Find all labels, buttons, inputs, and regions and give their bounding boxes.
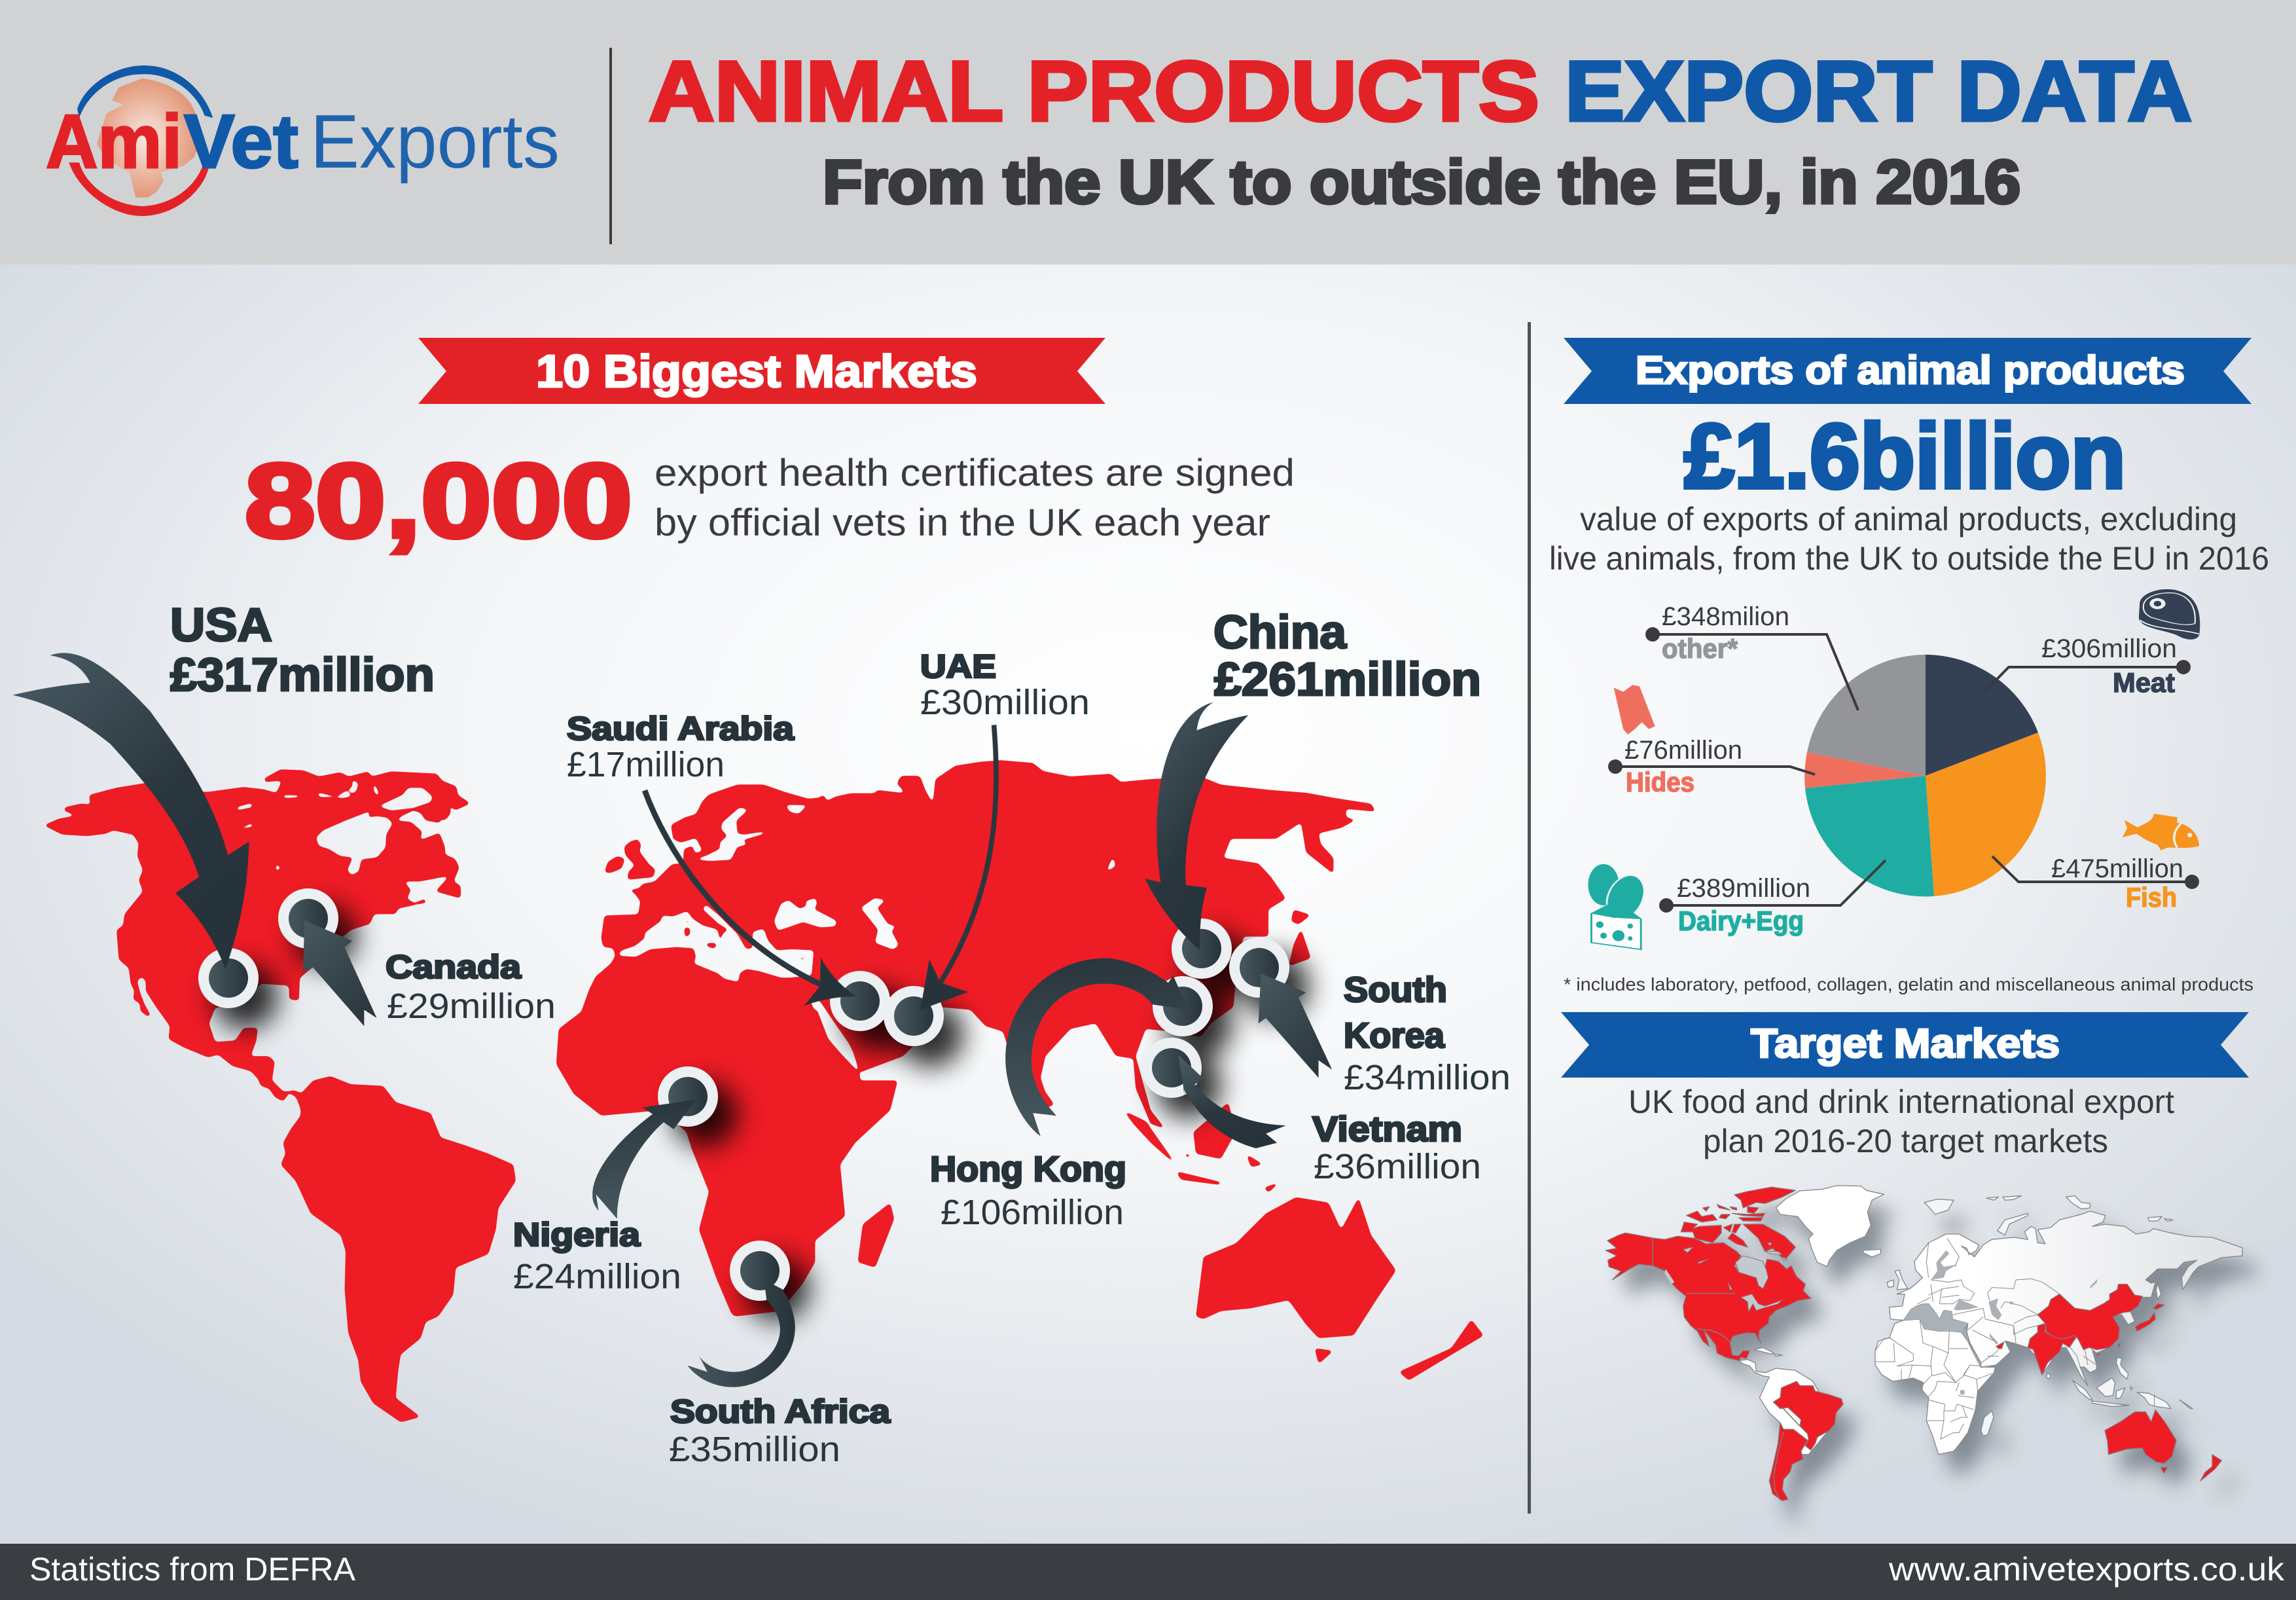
icon: fish [2123, 814, 2199, 850]
stat: 80,000 certificates: 80,000 [245, 442, 632, 559]
logo: AmiVet Exports: Vet [184, 99, 298, 184]
map: sub-Saharan Africa [556, 1010, 898, 1317]
subtitle: From the UK to outside the EU, in 2016 [823, 147, 2020, 216]
world map: target markets [1605, 1186, 2257, 1520]
marker shadows [213, 905, 1309, 1321]
marker: USA [198, 948, 259, 1008]
label: Nigeria: Nigeria [513, 1216, 641, 1253]
text: export plan: UK food and drink international export [1628, 1083, 2174, 1120]
text: value of exports: live animals, from the UK to outside the EU in 2016 [1549, 540, 2269, 577]
callout: dairy and egg: Dairy+Egg [1678, 905, 1804, 936]
divider [1528, 322, 1531, 1514]
label: USA: £317million [170, 649, 435, 701]
text: value of exports: value of exports of animal products, excluding [1580, 501, 2237, 537]
arrow: China [1145, 702, 1248, 950]
logo: AmiVet Exports: Exports [310, 99, 560, 184]
label: Saudi Arabia: £17million [567, 745, 725, 784]
label: USA: USA [170, 600, 272, 651]
label: Nigeria: £24million [513, 1257, 681, 1296]
label: China: China [1213, 607, 1347, 659]
arrow: Saudi Arabia [645, 790, 856, 1006]
marker: Canada [278, 888, 338, 949]
label: South Korea: £34million [1344, 1058, 1511, 1097]
footer: www.amivetexports.co.uk [1888, 1551, 2285, 1588]
banner: Exports of animal products: Exports of animal products [1636, 348, 2185, 392]
banner: Target Markets [1561, 1012, 2249, 1078]
label: Vietnam: £36million [1314, 1147, 1481, 1186]
label: Canada: £29million [387, 987, 556, 1026]
stat: 80,000 certificates: by official vets in the UK each year [655, 501, 1270, 544]
label: UAE [920, 648, 1090, 722]
footnote: * includes laboratory, petfood, collagen, gelatin and miscellaneous animal products [1564, 974, 2253, 994]
map: cast shadow [1620, 1205, 2257, 1520]
icon: steak [2139, 589, 2200, 640]
label: Hong Kong: Hong Kong [930, 1150, 1126, 1189]
marker: Nigeria [658, 1066, 718, 1127]
callout: fish: Fish [2126, 882, 2177, 913]
callout: fish [1992, 854, 2199, 913]
callout: meat [1983, 634, 2191, 698]
callout: other: £348milion [1662, 602, 1789, 631]
callout: hides [1608, 736, 1815, 797]
map: seas [1903, 1250, 2098, 1394]
label: South Korea: Korea [1344, 1016, 1445, 1055]
map: Asia [914, 760, 1376, 1129]
label: Vietnam [1312, 1110, 1481, 1186]
callout: other: other* [1662, 633, 1738, 664]
arrow: Vietnam [1178, 1055, 1286, 1148]
callout: other [1645, 602, 1858, 710]
arrow: South Korea [1259, 973, 1332, 1078]
title: ANIMAL PRODUCTS [649, 43, 1539, 139]
banner: Target Markets: Target Markets [1751, 1021, 2060, 1066]
marker: South Korea [1229, 937, 1289, 998]
arrow: UAE [920, 725, 996, 1010]
pie chart [1804, 655, 2046, 896]
footer: Statistics from DEFRA [29, 1551, 356, 1588]
marker: Vietnam [1141, 1038, 1202, 1098]
label: Hong Kong: £106million [941, 1193, 1124, 1232]
stat: 80,000 certificates: export health certificates are signed [655, 452, 1295, 494]
arrow: Hong Kong [1005, 958, 1189, 1136]
label: South Africa [669, 1393, 891, 1469]
map: South America [281, 1076, 516, 1423]
arrow: USA [12, 653, 249, 969]
callout: meat: £306million [2041, 634, 2177, 663]
map: Eurasia, Africa and Australasia [1875, 1196, 2242, 1481]
logo: AmiVet Exports: Ami [46, 99, 182, 184]
callout: fish: £475million [2051, 854, 2183, 883]
marker: Hong Kong [1153, 976, 1213, 1036]
page background [0, 264, 2296, 1544]
banner: 10 Biggest Markets: 10 Biggest Markets [536, 346, 977, 397]
label: Canada [386, 949, 556, 1026]
callout: dairy and egg: £389million [1677, 874, 1810, 903]
arrow: Canada [303, 920, 377, 1026]
map: British Isles [604, 839, 656, 880]
label: Saudi Arabia: Saudi Arabia [567, 710, 795, 747]
callout: hides: £76million [1624, 736, 1742, 765]
label: USA [170, 600, 435, 701]
header band [0, 0, 2296, 264]
label: Saudi Arabia [567, 710, 795, 784]
logo: AmiVet Exports [46, 65, 560, 216]
label: UAE: £30million [920, 683, 1090, 722]
label: Hong Kong [930, 1150, 1126, 1232]
callout: dairy and egg [1659, 860, 1886, 936]
callout: meat: Meat [2113, 667, 2175, 698]
banner: Exports of animal products [1564, 338, 2251, 404]
footer [0, 1544, 2296, 1600]
arrow: South Africa [687, 1280, 795, 1387]
icon: dairy and egg [1588, 864, 1649, 949]
map: red target countries [1996, 1284, 2221, 1481]
label: China: £261million [1214, 654, 1481, 706]
text: value of exports [1549, 501, 2269, 577]
title: EXPORT DATA [1565, 43, 2192, 139]
marker: China [1172, 918, 1232, 979]
label: South Korea: South [1344, 970, 1447, 1009]
label: China [1213, 607, 1481, 706]
map: islands and Australasia [857, 909, 1484, 1381]
world map: 10 biggest markets [44, 760, 1484, 1423]
marker: South Africa [730, 1241, 790, 1301]
label: Canada: Canada [386, 949, 522, 985]
map: Europe, Middle East and North Africa [577, 776, 918, 1072]
marker: Saudi Arabia [830, 971, 890, 1031]
map: country borders [1875, 1239, 2155, 1439]
label: South Africa: £35million [669, 1430, 840, 1469]
banner: 10 Biggest Markets [418, 338, 1105, 404]
marker: UAE [884, 986, 944, 1046]
icon: hide [1614, 685, 1655, 735]
text: export plan: plan 2016-20 target markets [1703, 1123, 2108, 1159]
label: South Korea [1344, 970, 1511, 1097]
label: Nigeria [513, 1216, 681, 1296]
callout: hides: Hides [1626, 767, 1695, 797]
label: Vietnam: Vietnam [1312, 1110, 1462, 1149]
map: North America [44, 769, 471, 1108]
map: Americas [1605, 1186, 1884, 1500]
label: UAE: UAE [920, 648, 996, 685]
text: export plan [1628, 1083, 2174, 1159]
stat: 1.6 billion: £1.6billion [1684, 405, 2126, 507]
label: South Africa: South Africa [670, 1393, 891, 1430]
stat: 80,000 certificates [245, 442, 1295, 559]
title [649, 43, 2192, 139]
arrow: Nigeria [592, 1099, 696, 1219]
